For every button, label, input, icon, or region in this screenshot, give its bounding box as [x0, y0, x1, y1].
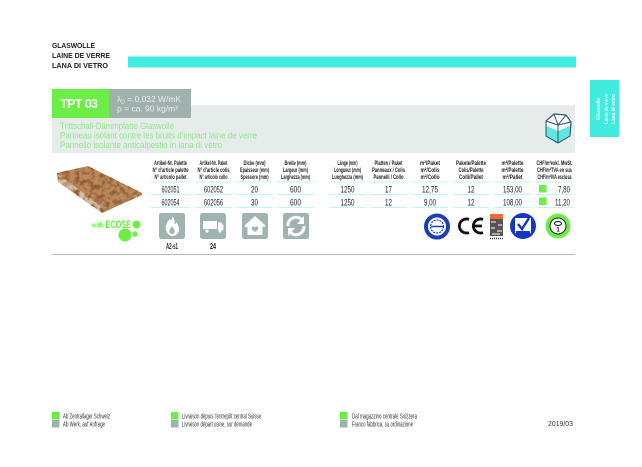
logo: green certification seal [546, 214, 570, 238]
table header: article and dimensions columns: Artikel-Nr. Paket [200, 160, 228, 167]
table header: article and dimensions columns: Pannelli / Collo [374, 174, 404, 181]
table header: article and dimensions columns: m²/Palette [502, 160, 524, 167]
table header: article and dimensions columns: N° articolo collo [200, 173, 228, 181]
product image: insulation board [57, 166, 142, 213]
technical values box [109, 89, 191, 118]
table row: 20 mm [162, 184, 570, 196]
table row: 30 mm: 1250 [340, 198, 354, 208]
table row: 30 mm: 602056 [204, 198, 223, 208]
table row: 20 mm: 1250 [340, 184, 354, 196]
side tab: Lana di vetro [611, 94, 617, 124]
table row: 20 mm: 12 [468, 184, 474, 196]
bottom divider [52, 254, 575, 255]
logo: with ECOSE [91, 219, 140, 242]
title: material names: LAINE DE VERRE [52, 51, 110, 60]
side tab: Laine de verre [604, 93, 610, 124]
table row: 20 mm: 602051 [162, 184, 180, 196]
logo: blue check mark [510, 213, 536, 239]
icon: glass wool cube [546, 114, 571, 143]
table header: article and dimensions columns: Lunghezza (mm) [332, 174, 363, 181]
table row: 20 mm: 7,80 [558, 184, 570, 196]
logo: green certification seal: 1 [556, 228, 560, 234]
table header: article and dimensions columns: Spessore (mm) [240, 174, 268, 181]
legend column: French: Livraison depuis l’entrepôt central Suisse [182, 414, 261, 420]
legend column: Italian [340, 412, 417, 428]
table header: article and dimensions columns: CHF/m²IVA esclusa [538, 174, 572, 181]
logo: blue quality seal [426, 216, 448, 238]
legend column: German: Ab Zentrallager Schweiz [63, 414, 110, 420]
side tab [590, 80, 619, 137]
logo: with ECOSE: with [91, 222, 103, 230]
table header: article and dimensions columns: Artikel-Nr. Palette [154, 160, 187, 167]
turquoise header bar [128, 56, 576, 68]
legend column: Italian: Dal magazzino centrale Svizzera [352, 414, 417, 420]
table header: article and dimensions columns: Platten / Paket [374, 160, 403, 167]
table header: article and dimensions columns: m²/Paket [420, 160, 441, 167]
icon: house with heart [242, 213, 268, 239]
table header: article and dimensions columns: N° d’article palette [152, 166, 189, 174]
table row: 30 mm: 602054 [162, 198, 180, 208]
table header: article and dimensions columns: Longueur (mm) [334, 167, 361, 174]
product description text: Panneau isolant contre les bruits d’impact laine de verre [60, 130, 257, 140]
table row: 20 mm: 600 [290, 184, 301, 196]
table row: 20 mm: 153,00 [503, 184, 522, 196]
label: A2-s1: A2-s1 [166, 242, 178, 251]
table row: 30 mm: 30 [251, 198, 258, 208]
product description text [60, 121, 257, 150]
table row: 30 mm [162, 198, 570, 208]
logo: with ECOSE: ECOSE [106, 219, 131, 231]
table header: article and dimensions columns: m²/Palette [502, 167, 524, 174]
title: material names: LANA DI VETRO [52, 61, 108, 70]
side tab: Glaswolle [596, 97, 602, 120]
table header: article and dimensions columns: m²/Colis [420, 167, 440, 174]
legend column: German: Ab Werk, auf Anfrage [63, 422, 105, 428]
table header: article and dimensions columns: CHF/m²exkl. MwSt. [536, 160, 573, 167]
table header: article and dimensions columns: Panneaux / Colis [372, 167, 405, 174]
technical values box: ρ = ca. 90 kg/m³ [117, 104, 178, 114]
icon: fire class [159, 213, 185, 239]
product code badge [52, 89, 109, 118]
product code badge: TPT 03 [60, 97, 98, 111]
table header: article and dimensions columns: Länge (mm) [338, 160, 358, 167]
product description text: Pannello isolante anticalpestio in lana di vetro [60, 140, 222, 150]
label: 24: 24 [210, 242, 216, 251]
table header: article and dimensions columns: Colis/Palette [458, 167, 484, 174]
product description text: Trittschall-Dämmplatte Glaswolle [60, 121, 174, 131]
legend column: German [52, 412, 110, 428]
table row: 30 mm: 600 [290, 198, 301, 208]
table header: article and dimensions columns: Breite (mm) [284, 160, 306, 167]
table header: article and dimensions columns: Pakete/Palette [456, 160, 486, 167]
technical values box: D [121, 100, 125, 106]
title: material names: GLASWOLLE [52, 41, 95, 50]
table header: article and dimensions columns: Dicke (mm) [244, 160, 266, 167]
legend column: French: Livraison départ usine, sur demande [182, 422, 252, 428]
table header: article and dimensions columns [152, 160, 573, 181]
icon: recycling arrows [283, 213, 309, 239]
table row: 30 mm: 12 [385, 198, 392, 208]
table row: 30 mm: 12 [468, 198, 474, 208]
table row: 20 mm: 20 [251, 184, 258, 196]
technical values box: = 0,032 W/mK [125, 95, 182, 104]
table header: article and dimensions columns: CHF/m²TVA en sus [537, 167, 572, 174]
table row: 20 mm: 17 [385, 184, 392, 196]
table row: 20 mm: 602052 [204, 184, 223, 196]
table header: article and dimensions columns: Epaisseur (mm) [240, 167, 269, 174]
table header: article and dimensions columns: m²/Collo [420, 174, 440, 181]
table header: article and dimensions columns: m²/Pallet [502, 174, 523, 181]
table header: article and dimensions columns: Colli/Pallet [459, 174, 484, 181]
table header: article and dimensions columns: N° d’article colis [198, 166, 230, 174]
table row: 30 mm: 108,00 [503, 198, 522, 208]
panel: product description background [52, 105, 575, 153]
legend column: Italian: Franco fabbrica, su ordinazione [352, 422, 413, 428]
table row: 30 mm: 11,20 [555, 198, 570, 208]
table header: article and dimensions columns: Largeur (mm) [283, 167, 308, 174]
table header: article and dimensions columns: Larghezza (mm) [281, 174, 310, 181]
legend column: French [171, 412, 261, 428]
icon: delivery truck [200, 213, 226, 239]
table header: article and dimensions columns: N° articolo pallet [154, 173, 187, 181]
date: 2019/03 [548, 419, 573, 428]
table row: 30 mm: 9,00 [424, 198, 436, 208]
table row: 20 mm: 12,75 [422, 184, 438, 196]
technical values box: λ [117, 95, 121, 104]
logo: declaration code [490, 214, 503, 238]
title: material names [52, 41, 110, 70]
logo: CE mark [459, 219, 483, 233]
table rules [151, 182, 573, 208]
